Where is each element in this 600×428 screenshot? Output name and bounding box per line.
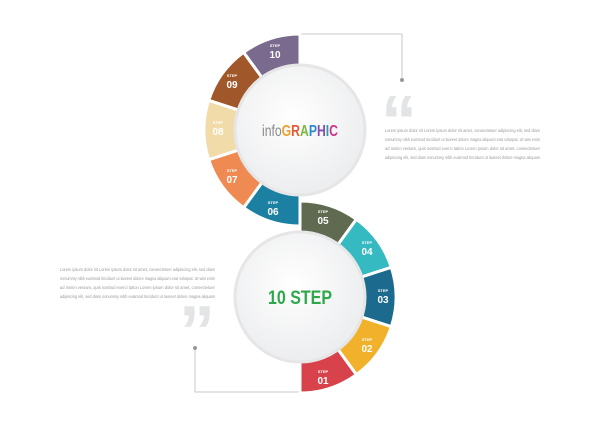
label 10: 10 [269, 50, 281, 61]
label 03: STEP [378, 288, 389, 293]
label 03 [377, 288, 389, 306]
label 07 [226, 168, 238, 186]
step 07 [209, 149, 264, 208]
label 05: STEP [318, 209, 329, 214]
label 10: STEP [270, 43, 281, 48]
label 06: 06 [267, 207, 279, 218]
label 04: 04 [361, 247, 373, 258]
step 08 [204, 100, 241, 160]
step 10 [244, 34, 300, 80]
step 01 [300, 347, 356, 393]
upper circle: infoGRAPHIC [235, 65, 365, 195]
text block: top right: nonummy nibh euismod tincidunt ut laoreet dolore magna aliquam erat volutpat. Ut wisi enim [385, 137, 540, 142]
upper ring: steps 06-10 [204, 34, 300, 226]
step labels [212, 43, 389, 387]
label 02: STEP [362, 337, 373, 342]
label 09 [226, 73, 238, 91]
step 06 [244, 180, 300, 226]
text block: top right: ad minim veniam, quis nostrud exerci tation Lorem ipsum dolor sit amet, consectetuer [385, 146, 540, 151]
label 09: 09 [226, 80, 238, 91]
quote mark: top right: “ [381, 82, 417, 162]
step 04 [336, 219, 391, 278]
text block: bottom left [60, 267, 215, 299]
connector line: top right [300, 34, 404, 82]
label 02 [361, 337, 373, 355]
label 01 [317, 369, 329, 387]
label 08 [212, 120, 224, 138]
label 07: 07 [226, 175, 238, 186]
step 03 [359, 267, 396, 327]
text block: top right [385, 128, 540, 160]
lower ring: steps 01-05 [300, 201, 396, 393]
lower circle: 10 STEP: 10 STEP [268, 288, 332, 309]
step 05 [300, 201, 356, 247]
label 01: 01 [317, 376, 329, 387]
label 02: 02 [361, 344, 373, 355]
label 06: STEP [268, 200, 279, 205]
text block: top right: adipiscing elit, sed diam nonummy nibh euismod tincidunt ut laoreet dolore magna aliquam [385, 155, 540, 160]
label 01: STEP [318, 369, 329, 374]
upper circle: infoGRAPHIC: infoGRAPHIC [262, 123, 338, 140]
text block: bottom left: nonummy nibh euismod tincidunt ut laoreet dolore magna aliquam erat volutpat. Ut wisi enim [60, 276, 215, 281]
label 05 [317, 209, 329, 227]
text block: bottom left: adipiscing elit, sed diam nonummy nibh euismod tincidunt ut laoreet dolore magna aliquam [60, 294, 215, 299]
label 06 [267, 200, 279, 218]
quote mark: bottom left: ” [179, 292, 215, 372]
text block: bottom left: ad minim veniam, quis nostrud exerci tation Lorem ipsum dolor sit amet, consectetuer [60, 285, 215, 290]
label 08: STEP [213, 120, 224, 125]
label 03: 03 [377, 295, 389, 306]
text block: bottom left: Lorem ipsum dolor sit Lorem ipsum dolor sit amet, consectetuer adipiscing elit, sed diam [60, 267, 215, 272]
step 09 [209, 52, 264, 111]
lower circle: 10 STEP [235, 232, 365, 362]
label 04 [361, 240, 373, 258]
connector line: bottom left [193, 346, 300, 392]
label 08: 08 [212, 127, 224, 138]
label 05: 05 [317, 216, 329, 227]
label 10 [269, 43, 281, 61]
text block: top right: Lorem ipsum dolor sit Lorem ipsum dolor sit amet, consectetuer adipiscing elit, sed diam [385, 128, 540, 133]
label 09: STEP [227, 73, 238, 78]
label 07: STEP [227, 168, 238, 173]
step 02 [336, 316, 391, 375]
label 04: STEP [362, 240, 373, 245]
